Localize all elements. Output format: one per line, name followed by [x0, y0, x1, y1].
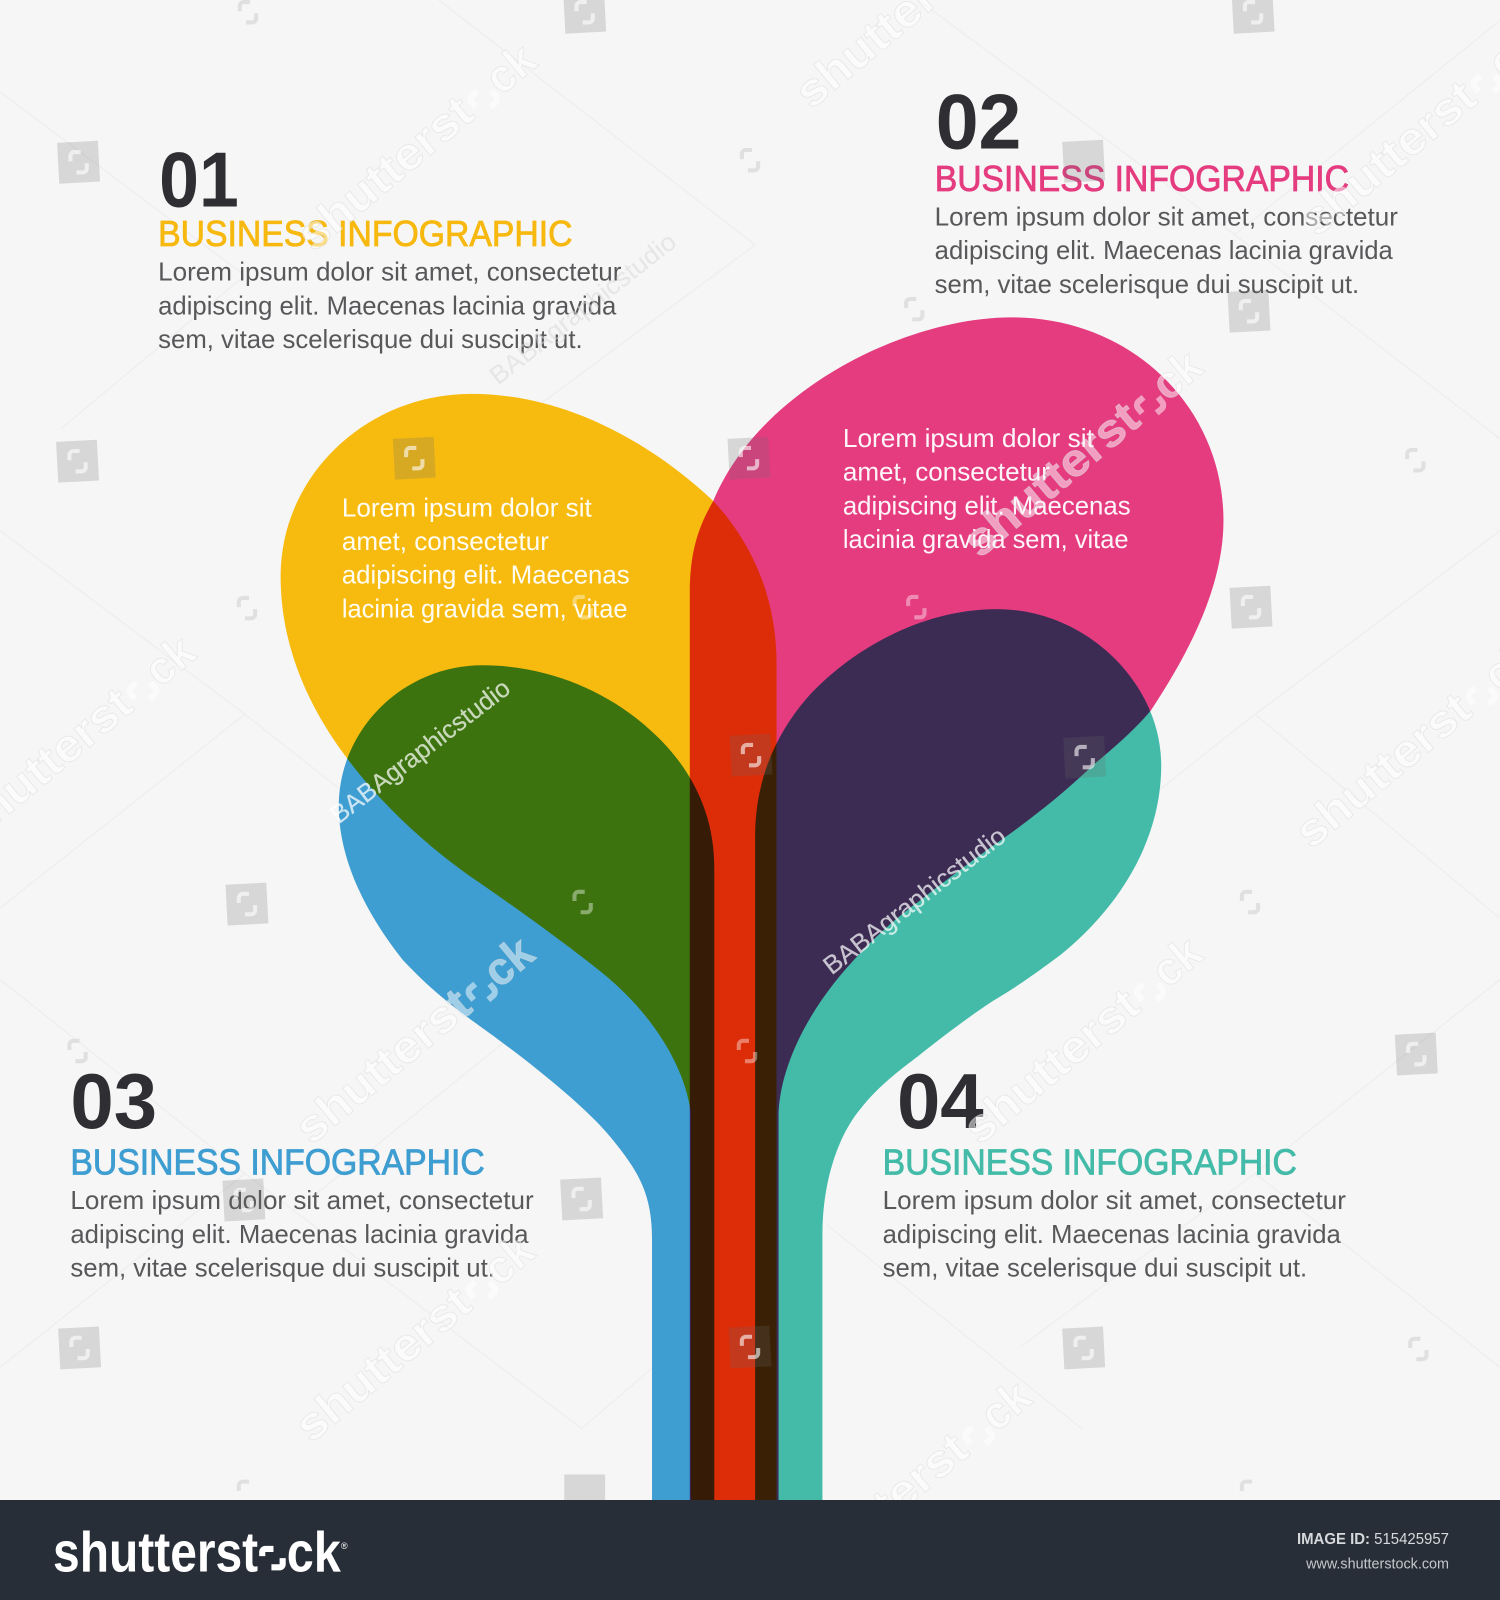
watermark: shutterstock text: shutterst	[284, 978, 481, 1154]
watermark: shutterstock text: shutterst	[286, 85, 483, 261]
body 02: sem, vitae scelerisque dui suscipit ut.	[935, 271, 1359, 299]
heading 04: BUSINESS INFOGRAPHIC	[883, 1141, 1297, 1182]
text inside pink leaf: Lorem ipsum dolor sit	[843, 425, 1094, 453]
footer logo: ck	[287, 1520, 341, 1583]
text inside yellow leaf: adipiscing elit. Maecenas	[342, 562, 630, 590]
number 04: 04	[897, 1059, 984, 1145]
body 01	[158, 259, 622, 354]
watermark: contributor text: BABAgraphicstudio	[325, 674, 516, 829]
watermark: contributor text: BABAgraphicstudio	[484, 228, 682, 390]
watermark: shutterstock text: ck	[969, 1369, 1041, 1441]
body 01: sem, vitae scelerisque dui suscipit ut.	[158, 326, 583, 354]
body 04: adipiscing elit. Maecenas lacinia gravida	[883, 1221, 1342, 1249]
heading 02: BUSINESS INFOGRAPHIC	[935, 158, 1349, 199]
text inside yellow leaf: lacinia gravida sem, vitae	[342, 595, 628, 623]
number 02: 02	[936, 79, 1021, 165]
leaf 01: yellow	[281, 394, 777, 1500]
number 01: 01	[159, 138, 239, 224]
body 04: sem, vitae scelerisque dui suscipit ut.	[883, 1255, 1307, 1283]
section 01 text	[158, 138, 622, 354]
text inside yellow leaf: amet, consectetur	[342, 528, 549, 556]
text inside pink leaf: adipiscing elit. Maecenas	[843, 492, 1131, 520]
section 02 text	[935, 79, 1398, 299]
watermark: contributor text: BABAgraphicstudio	[818, 822, 1011, 980]
body 03: Lorem ipsum dolor sit amet, consectetur	[70, 1187, 534, 1215]
watermark: shutterstock text: shutterst	[1284, 682, 1481, 858]
leaf 02: pink	[690, 317, 1223, 1500]
text inside pink leaf: amet, consectetur	[843, 459, 1051, 487]
watermark: shutterstock text: ck	[472, 925, 544, 997]
watermark: shutterstock text: shutterst	[953, 391, 1149, 567]
section 04 text	[883, 1059, 1346, 1283]
footer logo: shutterst	[53, 1520, 258, 1583]
body 04	[883, 1187, 1346, 1283]
text inside pink leaf: lacinia gravida sem, vitae	[843, 526, 1129, 554]
watermark: shutterstock text: ck	[1141, 339, 1212, 410]
body 03	[70, 1187, 534, 1283]
body 03: sem, vitae scelerisque dui suscipit ut.	[70, 1255, 495, 1283]
footer bar	[0, 1500, 1500, 1600]
watermark: shutterstock text: shutterst	[781, 1422, 978, 1597]
registered mark: ®	[341, 1541, 348, 1551]
text inside yellow leaf	[342, 494, 630, 623]
body 01: Lorem ipsum dolor sit amet, consectetur	[158, 259, 622, 287]
watermark: shutterstock text: shutterst	[953, 978, 1149, 1154]
leaf 04: teal	[755, 609, 1161, 1500]
text inside pink leaf	[843, 425, 1131, 554]
text inside yellow leaf: Lorem ipsum dolor sit	[342, 494, 592, 522]
image id: IMAGE ID: 515425957	[1297, 1531, 1449, 1548]
site url: www.shutterstock.com	[1305, 1556, 1449, 1572]
body 02: adipiscing elit. Maecenas lacinia gravida	[935, 237, 1394, 265]
watermark: shutterstock text: ck	[472, 1223, 544, 1295]
leaf 03: blue	[339, 665, 714, 1500]
section 03 text	[70, 1059, 534, 1283]
watermark: shutterstock text: ck	[475, 32, 546, 104]
heading 03: BUSINESS INFOGRAPHIC	[70, 1141, 485, 1182]
watermark: contributor text	[325, 228, 1011, 980]
body 04: Lorem ipsum dolor sit amet, consectetur	[883, 1187, 1346, 1215]
body 02	[935, 204, 1398, 299]
body 02: Lorem ipsum dolor sit amet, consectetur	[935, 204, 1398, 232]
body 03: adipiscing elit. Maecenas lacinia gravida	[70, 1221, 529, 1249]
watermark: shutterstock text: shutterst	[284, 1276, 481, 1452]
watermark: shutterstock text: shutterst	[1289, 70, 1486, 245]
body 01: adipiscing elit. Maecenas lacinia gravida	[158, 292, 617, 320]
number 03: 03	[70, 1059, 157, 1145]
watermark: shutterstock text: ck	[134, 624, 205, 696]
watermark: shutterstock text: ck	[1141, 925, 1212, 997]
heading 01: BUSINESS INFOGRAPHIC	[158, 213, 572, 254]
tree diagram: four overlapping leaves on stems	[281, 317, 1223, 1500]
